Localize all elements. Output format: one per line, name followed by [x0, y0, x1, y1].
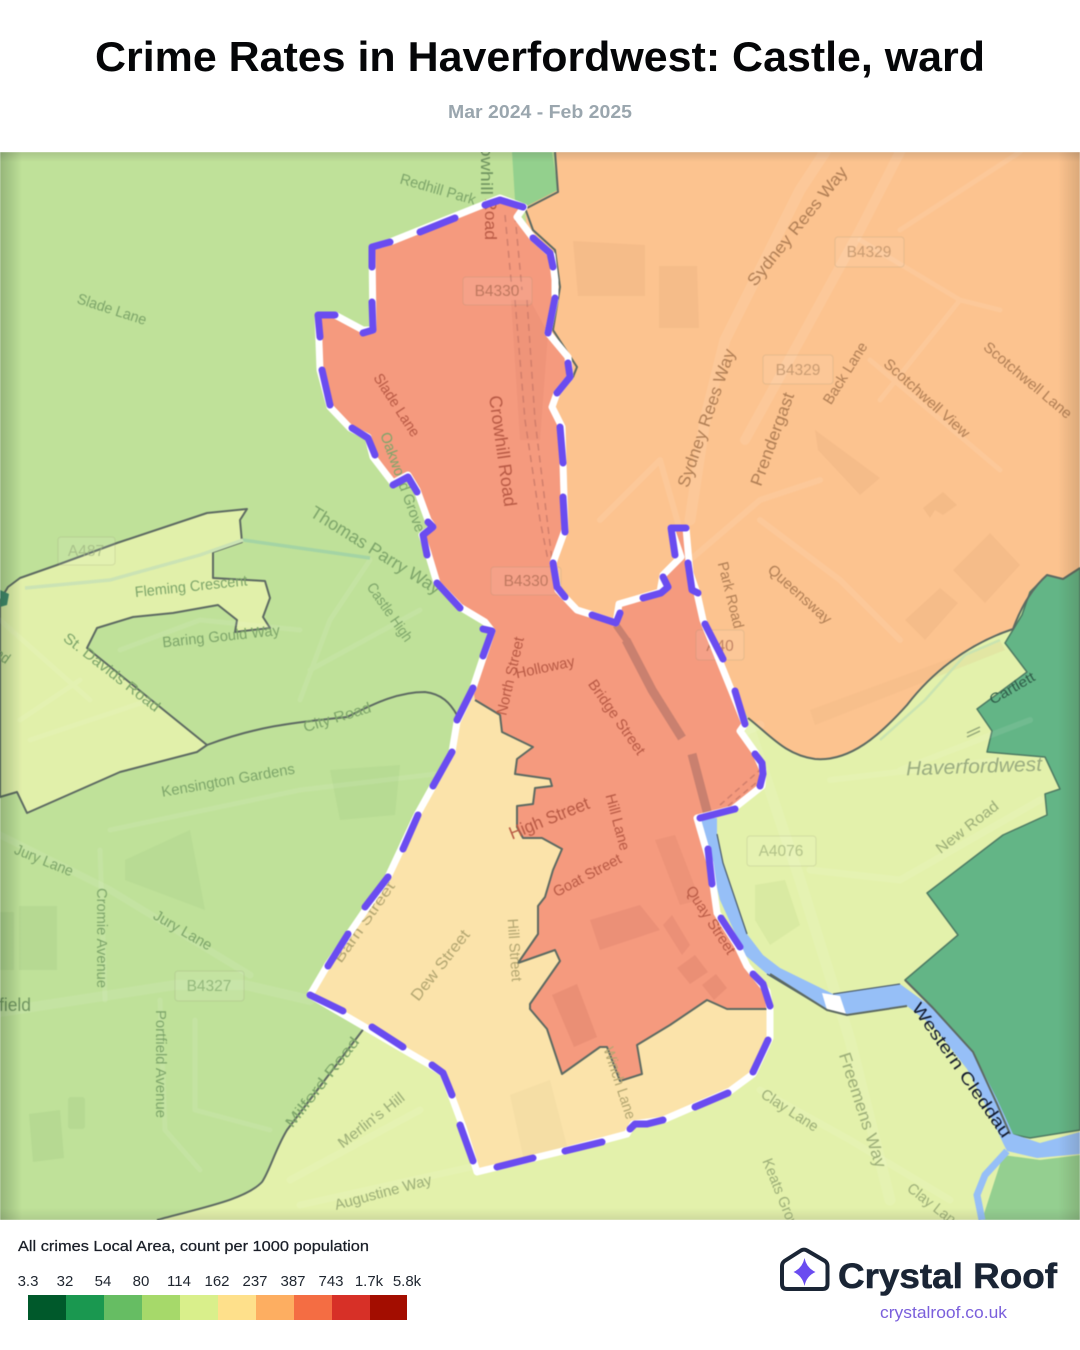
road labels: orange area — [674, 162, 1075, 630]
icon: house with star — [782, 1250, 828, 1289]
shield: B4330 north: B4330 — [475, 283, 520, 300]
label: Sydney Rees Way south: Sydney Rees Way — [674, 346, 739, 490]
logo website: crystalroof.co.uk — [880, 1304, 1008, 1322]
label: Road (top of Crowhill Road): Road — [481, 198, 500, 240]
label: Haverfordwest: Haverfordwest — [906, 754, 1044, 780]
region: left teal blob — [0, 590, 9, 607]
legend scale labels: 1.7k — [355, 1273, 384, 1290]
legend scale labels: 114 — [167, 1273, 191, 1290]
road number shields — [58, 237, 904, 1001]
region: western pale area — [0, 509, 270, 813]
label: Barn Street: Barn Street — [330, 878, 399, 966]
shield: B4329 south — [763, 355, 833, 384]
label: Freemens Way: Freemens Way — [835, 1050, 890, 1171]
ward boundary: white casing — [310, 198, 770, 1172]
label: Scotchwell Lane: Scotchwell Lane — [980, 339, 1075, 422]
legend scale labels: 32 — [57, 1273, 73, 1290]
label: Queensway: Queensway — [764, 561, 835, 628]
label: Hill Street: Hill Street — [504, 918, 525, 983]
label: Crowhill top: Crowhill — [477, 125, 496, 195]
label: Dew Street: Dew Street — [408, 926, 474, 1004]
legend scale labels — [18, 1273, 422, 1290]
shield: B4329 south: B4329 — [776, 362, 820, 379]
region: south and east pale area — [157, 629, 1080, 1220]
label: Hill Lane: Hill Lane — [602, 792, 633, 852]
shield: A40: A40 — [706, 638, 734, 655]
ward fill: high-crime area — [318, 198, 770, 1081]
road labels: green areas — [0, 125, 496, 1131]
legend scale labels: 743 — [318, 1273, 344, 1290]
label: Baring Gould Way: Baring Gould Way — [162, 622, 281, 651]
legend scale labels: 5.8k — [393, 1273, 422, 1290]
shield: B4330 south — [491, 567, 561, 595]
shield: A487 — [58, 537, 115, 565]
label: St. Davids Road: St. Davids Road — [60, 630, 163, 716]
label: Bridge Street: Bridge Street — [584, 677, 649, 759]
legend scale labels: 162 — [204, 1273, 230, 1290]
label: Slade Lane: Slade Lane — [370, 371, 423, 440]
western stream — [25, 540, 243, 588]
label: Winch Lane: Winch Lane — [600, 1045, 639, 1122]
shield: A40 — [696, 630, 744, 660]
region: south-east green corner — [982, 1155, 1080, 1220]
shield: B4327: B4327 — [187, 978, 231, 995]
label: Kensington Gardens: Kensington Gardens — [160, 761, 296, 801]
eastern stream — [880, 640, 1000, 740]
label: Back Lane: Back Lane — [820, 339, 871, 408]
label: Jury Lane east: Jury Lane — [150, 907, 215, 954]
legend scale labels: 237 — [242, 1273, 268, 1290]
label: New Road: New Road — [933, 798, 1002, 857]
logo wordmark: Crystal Roof — [838, 1257, 1057, 1296]
legend scale labels: 54 — [95, 1273, 111, 1290]
label: Cartlett: Cartlett — [986, 668, 1038, 707]
label: Milford Road: Milford Road — [282, 1034, 363, 1131]
map roads and buildings — [0, 152, 1040, 1205]
label: Thomas Parry Way: Thomas Parry Way — [307, 502, 445, 598]
stream — [243, 540, 370, 558]
legend scale labels: 3.3 — [18, 1273, 38, 1290]
label: Fleming Crescent: Fleming Crescent — [134, 572, 249, 601]
subtitle: date range: Mar 2024 - Feb 2025 — [448, 102, 632, 122]
label: Prendergast: Prendergast — [747, 390, 798, 488]
road labels: pale green area — [333, 727, 1044, 1237]
shield: A487: A487 — [68, 543, 104, 560]
label: Quay Street: Quay Street — [682, 883, 739, 958]
region: eastern dark green area — [905, 568, 1080, 1138]
shield: B4327 — [175, 971, 244, 1001]
ward boundary: purple dashes — [310, 200, 770, 1167]
label: Park Road: Park Road — [714, 560, 747, 630]
label: Cromie Avenue: Cromie Avenue — [93, 888, 110, 988]
shield: A4076 — [747, 836, 816, 866]
label: Clay Lane south: Clay Lane — [904, 1180, 965, 1233]
boundary lines — [157, 152, 1080, 1220]
shield: B4330 south: B4330 — [504, 573, 549, 590]
label: Portfield Avenue: Portfield Avenue — [152, 1010, 169, 1118]
legend scale labels: 80 — [133, 1273, 149, 1290]
icon: railway station — [967, 727, 980, 737]
river: Western Cleddau — [700, 818, 1080, 1220]
label: High Street: High Street — [506, 793, 592, 843]
legend title: All crimes Local Area, count per 1000 population — [18, 1238, 369, 1255]
ward inner details — [504, 214, 760, 1046]
road labels: ward red area — [370, 198, 739, 958]
title: Crime Rates in Haverfordwest: Castle, ward — [95, 33, 985, 80]
label: Goat Street: Goat Street — [550, 850, 625, 901]
label: North Street: North Street — [493, 634, 528, 717]
label: Merlin's Hill: Merlin's Hill — [335, 1089, 408, 1152]
legend scale labels: 387 — [280, 1273, 306, 1290]
label: Castle High: Castle High — [363, 580, 416, 645]
label: Augustine Way: Augustine Way — [333, 1171, 434, 1214]
label: Clay Lane north: Clay Lane — [758, 1086, 821, 1135]
label: Scotchwell View: Scotchwell View — [880, 355, 973, 442]
label: Jury Lane west: Jury Lane — [12, 841, 76, 880]
label: Sydney Rees Way north: Sydney Rees Way — [743, 162, 852, 290]
region: eastern orange area — [525, 152, 1080, 759]
label: Keats Grove: Keats Grove — [758, 1156, 804, 1237]
label: Crowhill Road: Crowhill Road — [485, 394, 520, 508]
shield: B4330 north — [463, 277, 532, 305]
label: Redhill Park: Redhill Park — [398, 171, 478, 209]
road labels: ward yellow area — [330, 878, 639, 1122]
label: Holloway: Holloway — [514, 653, 577, 682]
region: north green sliver — [512, 152, 558, 208]
label: Western Cleddau: Western Cleddau — [908, 999, 1015, 1141]
shield: B4329 north — [835, 237, 904, 267]
label: Oakwood Grove: Oakwood Grove — [376, 430, 428, 534]
label: City Road: City Road — [301, 699, 373, 736]
shield: B4329 north: B4329 — [847, 244, 891, 261]
logo: Crystal Roof — [782, 1250, 1057, 1322]
map edge shading — [0, 152, 1080, 1220]
label: Slade Lane west: Slade Lane — [75, 291, 149, 329]
shield: A4076: A4076 — [759, 843, 803, 860]
legend colour bar — [28, 1295, 407, 1320]
ward fill: low-crime area — [314, 694, 766, 1168]
